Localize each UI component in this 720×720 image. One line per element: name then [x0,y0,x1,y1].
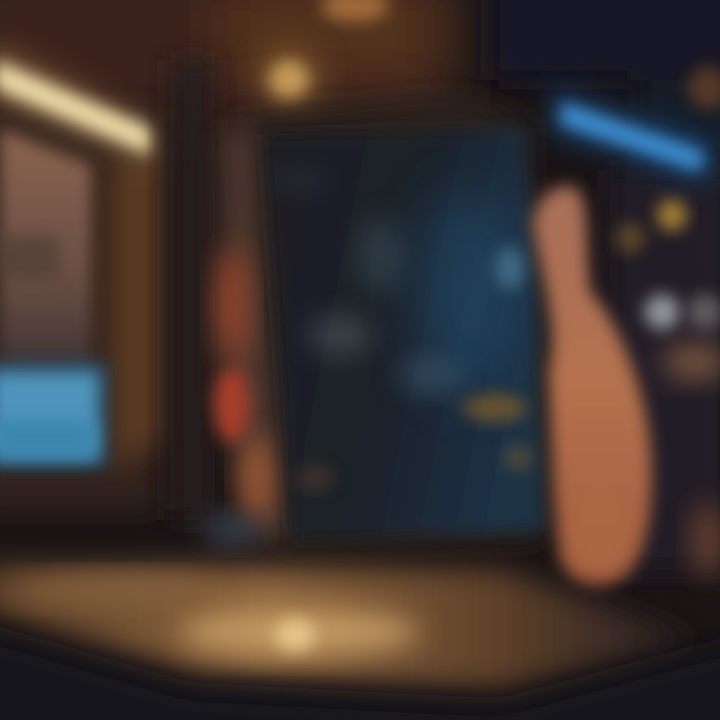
light strip [0,40,160,168]
phone left edge [202,120,285,544]
tabletop glow [0,565,700,688]
wooden pillar [112,150,162,470]
background behind hand: right side [610,170,720,578]
background: warm upper wall [0,0,460,130]
smartphone [202,95,545,548]
left wall panel [0,110,160,510]
phone frame top [232,95,545,548]
phone screen [264,128,545,540]
dark column [170,60,215,520]
blue light bar [550,85,715,185]
lamp glow: round light [252,42,328,118]
left blue screen [0,362,108,470]
top right warm spot [688,66,720,110]
background: dark navy top right [490,0,720,280]
ceiling lamp glow [321,0,389,22]
bottom dark edge [0,628,720,720]
hand [533,186,652,586]
